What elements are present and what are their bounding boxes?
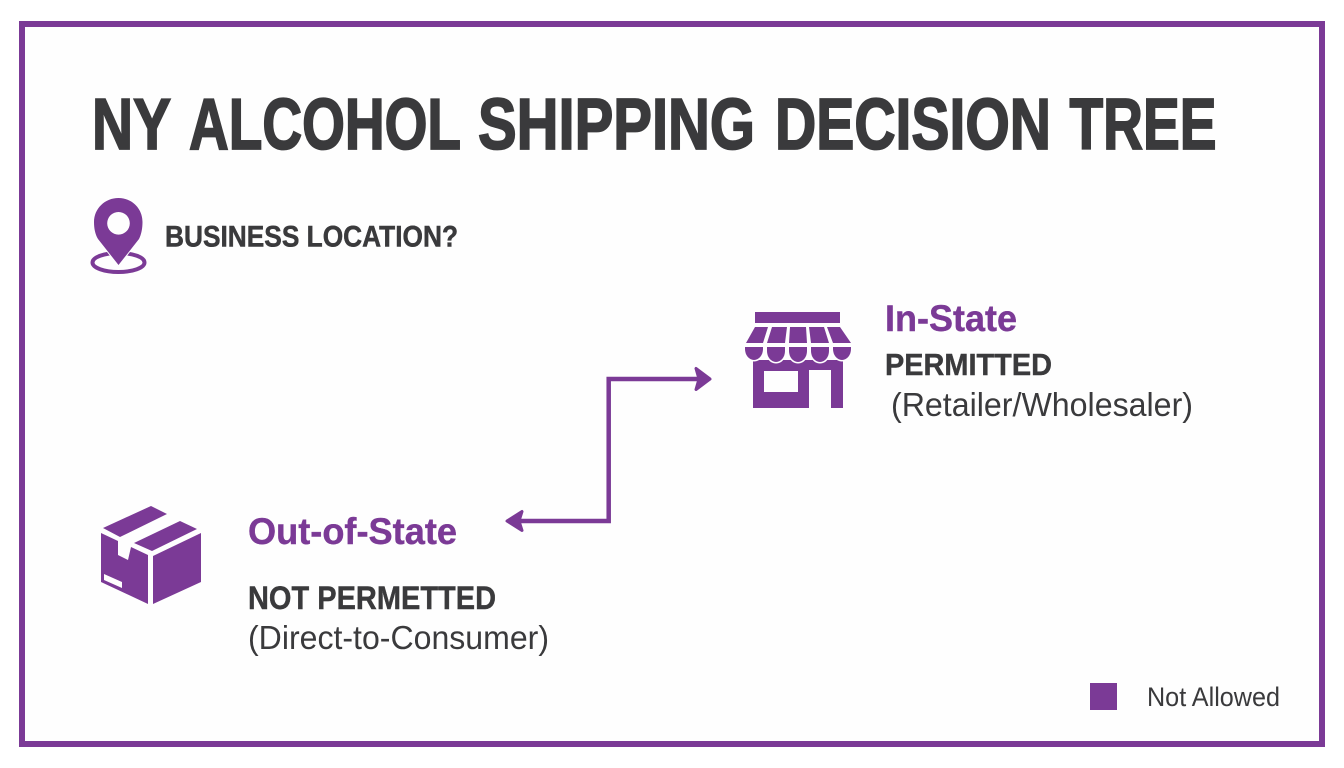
label: retailer or wholesaler: (Retailer/Wholesaler) — [891, 386, 1193, 423]
title: NY — [92, 85, 171, 165]
title: ALCOHOL — [189, 85, 461, 165]
legend: Not Allowed — [1147, 682, 1280, 712]
title: SHIPPING — [478, 85, 755, 165]
label: not permitted: NOT PERMETTED — [248, 580, 496, 616]
icon: location pin — [92, 198, 144, 272]
label: permitted: PERMITTED — [885, 347, 1052, 382]
icon: package box — [101, 506, 201, 604]
label: in-state: In-State — [885, 298, 1017, 339]
icon: storefront — [745, 312, 851, 408]
arrow: branch connector — [507, 368, 710, 530]
legend — [1090, 682, 1280, 712]
title — [92, 85, 1216, 165]
label: direct-to-consumer: (Direct-to-Consumer) — [248, 619, 549, 656]
title: DECISION — [775, 85, 1051, 165]
label: out-of-state: Out-of-State — [248, 511, 457, 552]
heading: business location question: BUSINESS LOCATION? — [165, 220, 458, 254]
title: TREE — [1070, 85, 1216, 165]
